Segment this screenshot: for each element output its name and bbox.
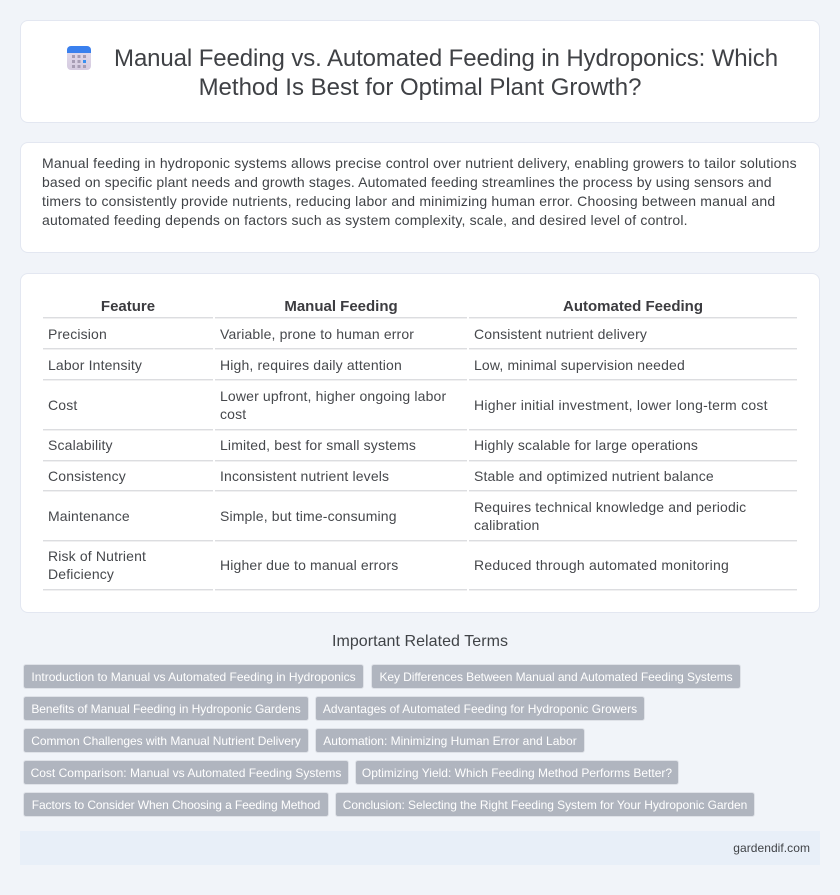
table row: risk of nutrient deficiency: Deficiency <box>48 566 114 582</box>
table row: precision: Consistent nutrient delivery <box>474 326 647 342</box>
table row: scalability <box>48 437 698 453</box>
table header: Feature <box>101 298 155 315</box>
panel: comparison table <box>20 273 820 613</box>
related terms chips: Conclusion: Selecting the Right Feeding System for Your Hydroponic Garden <box>343 798 747 812</box>
related terms chips: Advantages of Automated Feeding for Hydroponic Growers <box>323 702 637 716</box>
table row: cost: Lower upfront, higher ongoing labor <box>220 388 446 404</box>
text block: introduction: Manual feeding in hydroponic systems allows precise control over nutrient delivery, enabling growers to tailor solutions <box>42 155 797 171</box>
table row: maintenance <box>48 499 746 533</box>
related terms chips: Cost Comparison: Manual vs Automated Feeding Systems <box>31 766 341 780</box>
table header: Automated Feeding <box>563 298 703 315</box>
panel: introduction <box>20 142 820 253</box>
related terms chips: Introduction to Manual vs Automated Feeding in Hydroponics <box>31 670 356 684</box>
title: Method Is Best for Optimal Plant Growth? <box>199 74 641 101</box>
table row: scalability: Scalability <box>48 437 113 453</box>
table row: consistency: Inconsistent nutrient levels <box>220 468 389 484</box>
text block: introduction: based on specific plant needs and growth stages. Automated feeding streamlines the process by using sensors and <box>42 174 772 190</box>
table row: risk of nutrient deficiency: Reduced through automated monitoring <box>474 557 729 573</box>
footer source text: gardendif.com <box>733 841 810 855</box>
text block: introduction: automated feeding depends on factors such as system complexity, scale, and desired level of control. <box>42 212 688 228</box>
table row: labor intensity: High, requires daily attention <box>220 357 402 373</box>
panel: title card <box>20 20 820 123</box>
text block: introduction <box>42 155 797 228</box>
table row: risk of nutrient deficiency: Risk of Nutrient <box>48 548 146 564</box>
related terms chips: Key Differences Between Manual and Automated Feeding Systems <box>379 670 733 684</box>
table row: labor intensity <box>48 357 685 373</box>
table row: maintenance: Simple, but time-consuming <box>220 508 397 524</box>
table row: maintenance: calibration <box>474 517 539 533</box>
footer bar <box>20 831 820 865</box>
table row: cost <box>48 388 768 422</box>
table row: cost: Cost <box>48 397 77 413</box>
title: Manual Feeding vs. Automated Feeding in Hydroponics: Which <box>114 45 778 72</box>
table row: cost: cost <box>220 406 246 422</box>
table row: maintenance: Requires technical knowledge and periodic <box>474 499 746 515</box>
table row: scalability: Limited, best for small systems <box>220 437 416 453</box>
table row: precision: Variable, prone to human error <box>220 326 414 342</box>
table row: cost: Higher initial investment, lower long-term cost <box>474 397 768 413</box>
text block: introduction: timers to consistently provide nutrients, reducing labor and minimizing human error. Choosing between manual and <box>42 193 775 209</box>
table row: scalability: Highly scalable for large operations <box>474 437 698 453</box>
table row: labor intensity: Labor Intensity <box>48 357 142 373</box>
table row: consistency: Consistency <box>48 468 126 484</box>
related terms chips <box>23 664 755 817</box>
table row: consistency <box>48 468 714 484</box>
icon: calendar <box>67 46 91 70</box>
table row: risk of nutrient deficiency: Higher due to manual errors <box>220 557 398 573</box>
title <box>114 45 778 101</box>
table row: maintenance: Maintenance <box>48 508 130 524</box>
table header: Manual Feeding <box>284 298 398 315</box>
related terms chips: Automation: Minimizing Human Error and Labor <box>323 734 577 748</box>
heading: important related terms: Important Related Terms <box>332 633 508 650</box>
table row: precision <box>48 326 647 342</box>
related terms chips: Optimizing Yield: Which Feeding Method Performs Better? <box>362 766 672 780</box>
table header <box>101 298 703 315</box>
table row: risk of nutrient deficiency <box>48 548 729 582</box>
related terms chips: Benefits of Manual Feeding in Hydroponic Gardens <box>31 702 301 716</box>
table row: precision: Precision <box>48 326 107 342</box>
table row: consistency: Stable and optimized nutrient balance <box>474 468 714 484</box>
table row: labor intensity: Low, minimal supervision needed <box>474 357 685 373</box>
related terms chips: Common Challenges with Manual Nutrient Delivery <box>31 734 301 748</box>
related terms chips: Factors to Consider When Choosing a Feeding Method <box>32 798 320 812</box>
